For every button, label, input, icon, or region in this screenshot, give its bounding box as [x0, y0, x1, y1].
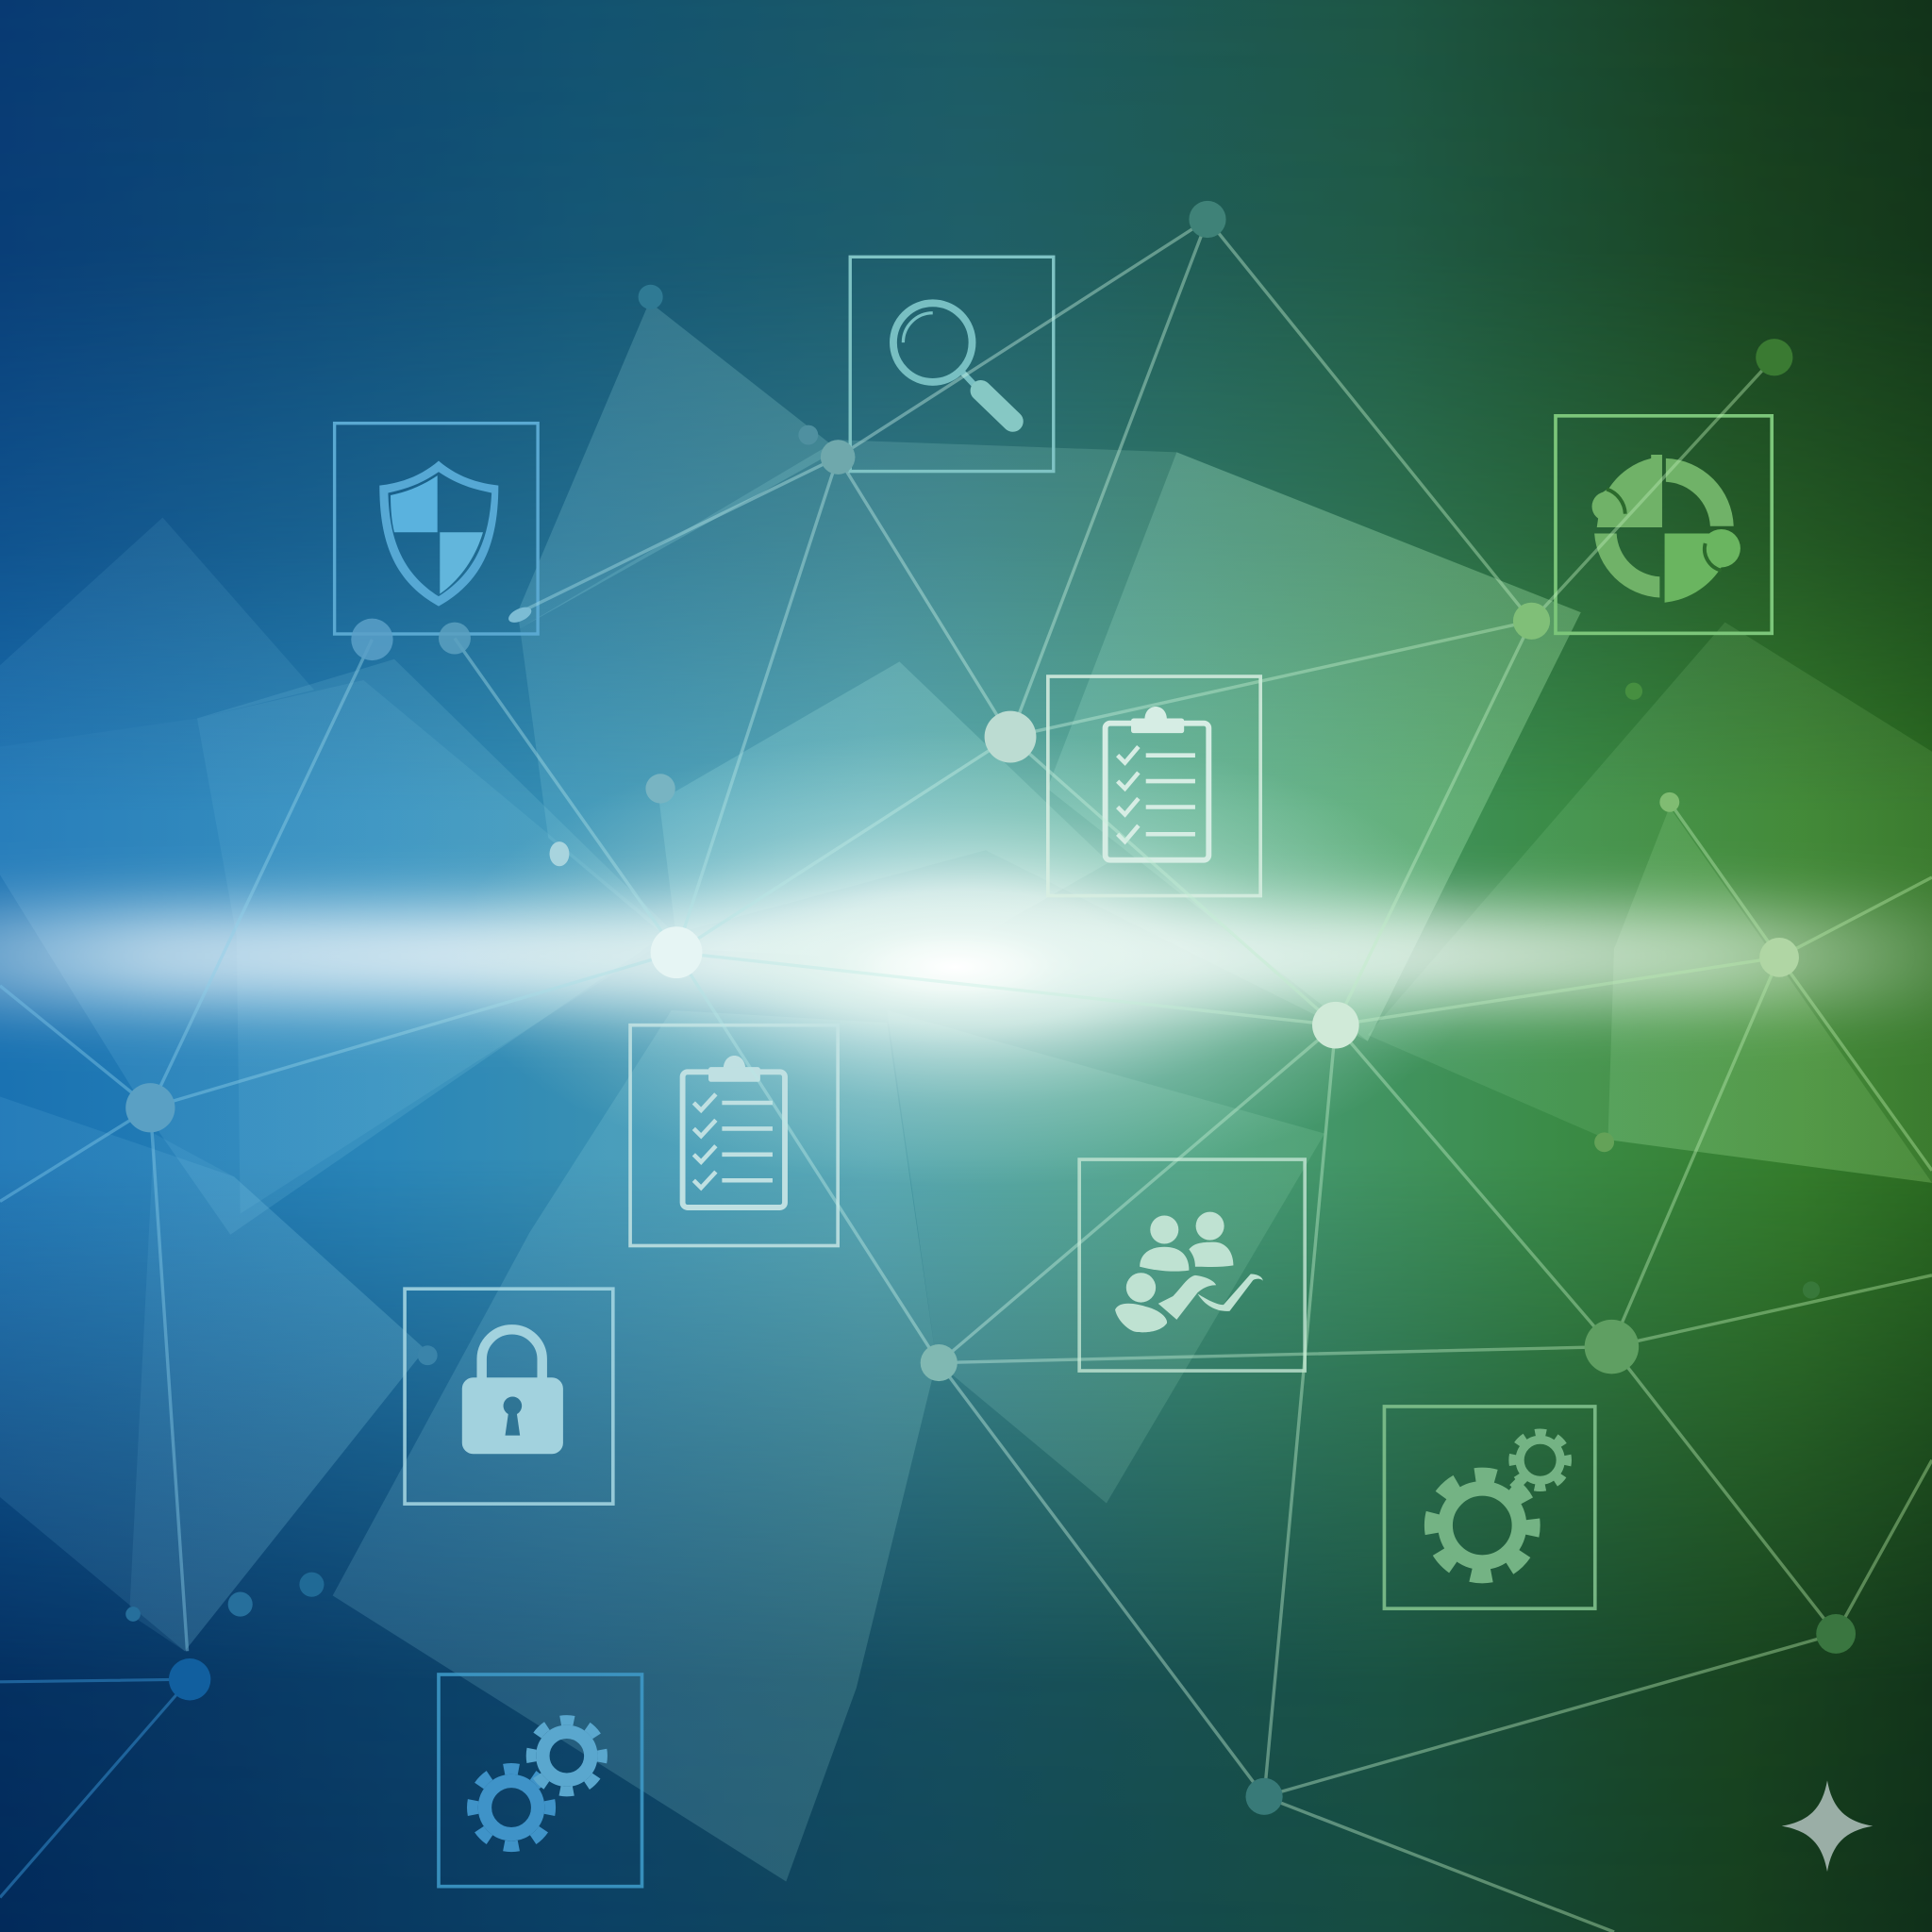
network lines lower left — [0, 1679, 190, 1897]
central light flare — [0, 731, 1932, 1187]
icon: magnifying glass — [850, 257, 1054, 472]
icon: sparkle watermark — [1782, 1780, 1873, 1872]
icon: shield — [335, 424, 538, 634]
icon: people with checkmark — [1079, 1159, 1305, 1371]
icon: padlock — [405, 1289, 613, 1504]
icon: clipboard checklist lower — [630, 1025, 838, 1245]
icon: puzzle pie — [1556, 416, 1772, 633]
icon: blue gears — [439, 1674, 641, 1887]
icon: clipboard checklist upper — [1048, 676, 1260, 896]
icon: green gears — [1384, 1407, 1595, 1608]
network nodes — [125, 201, 1856, 1815]
